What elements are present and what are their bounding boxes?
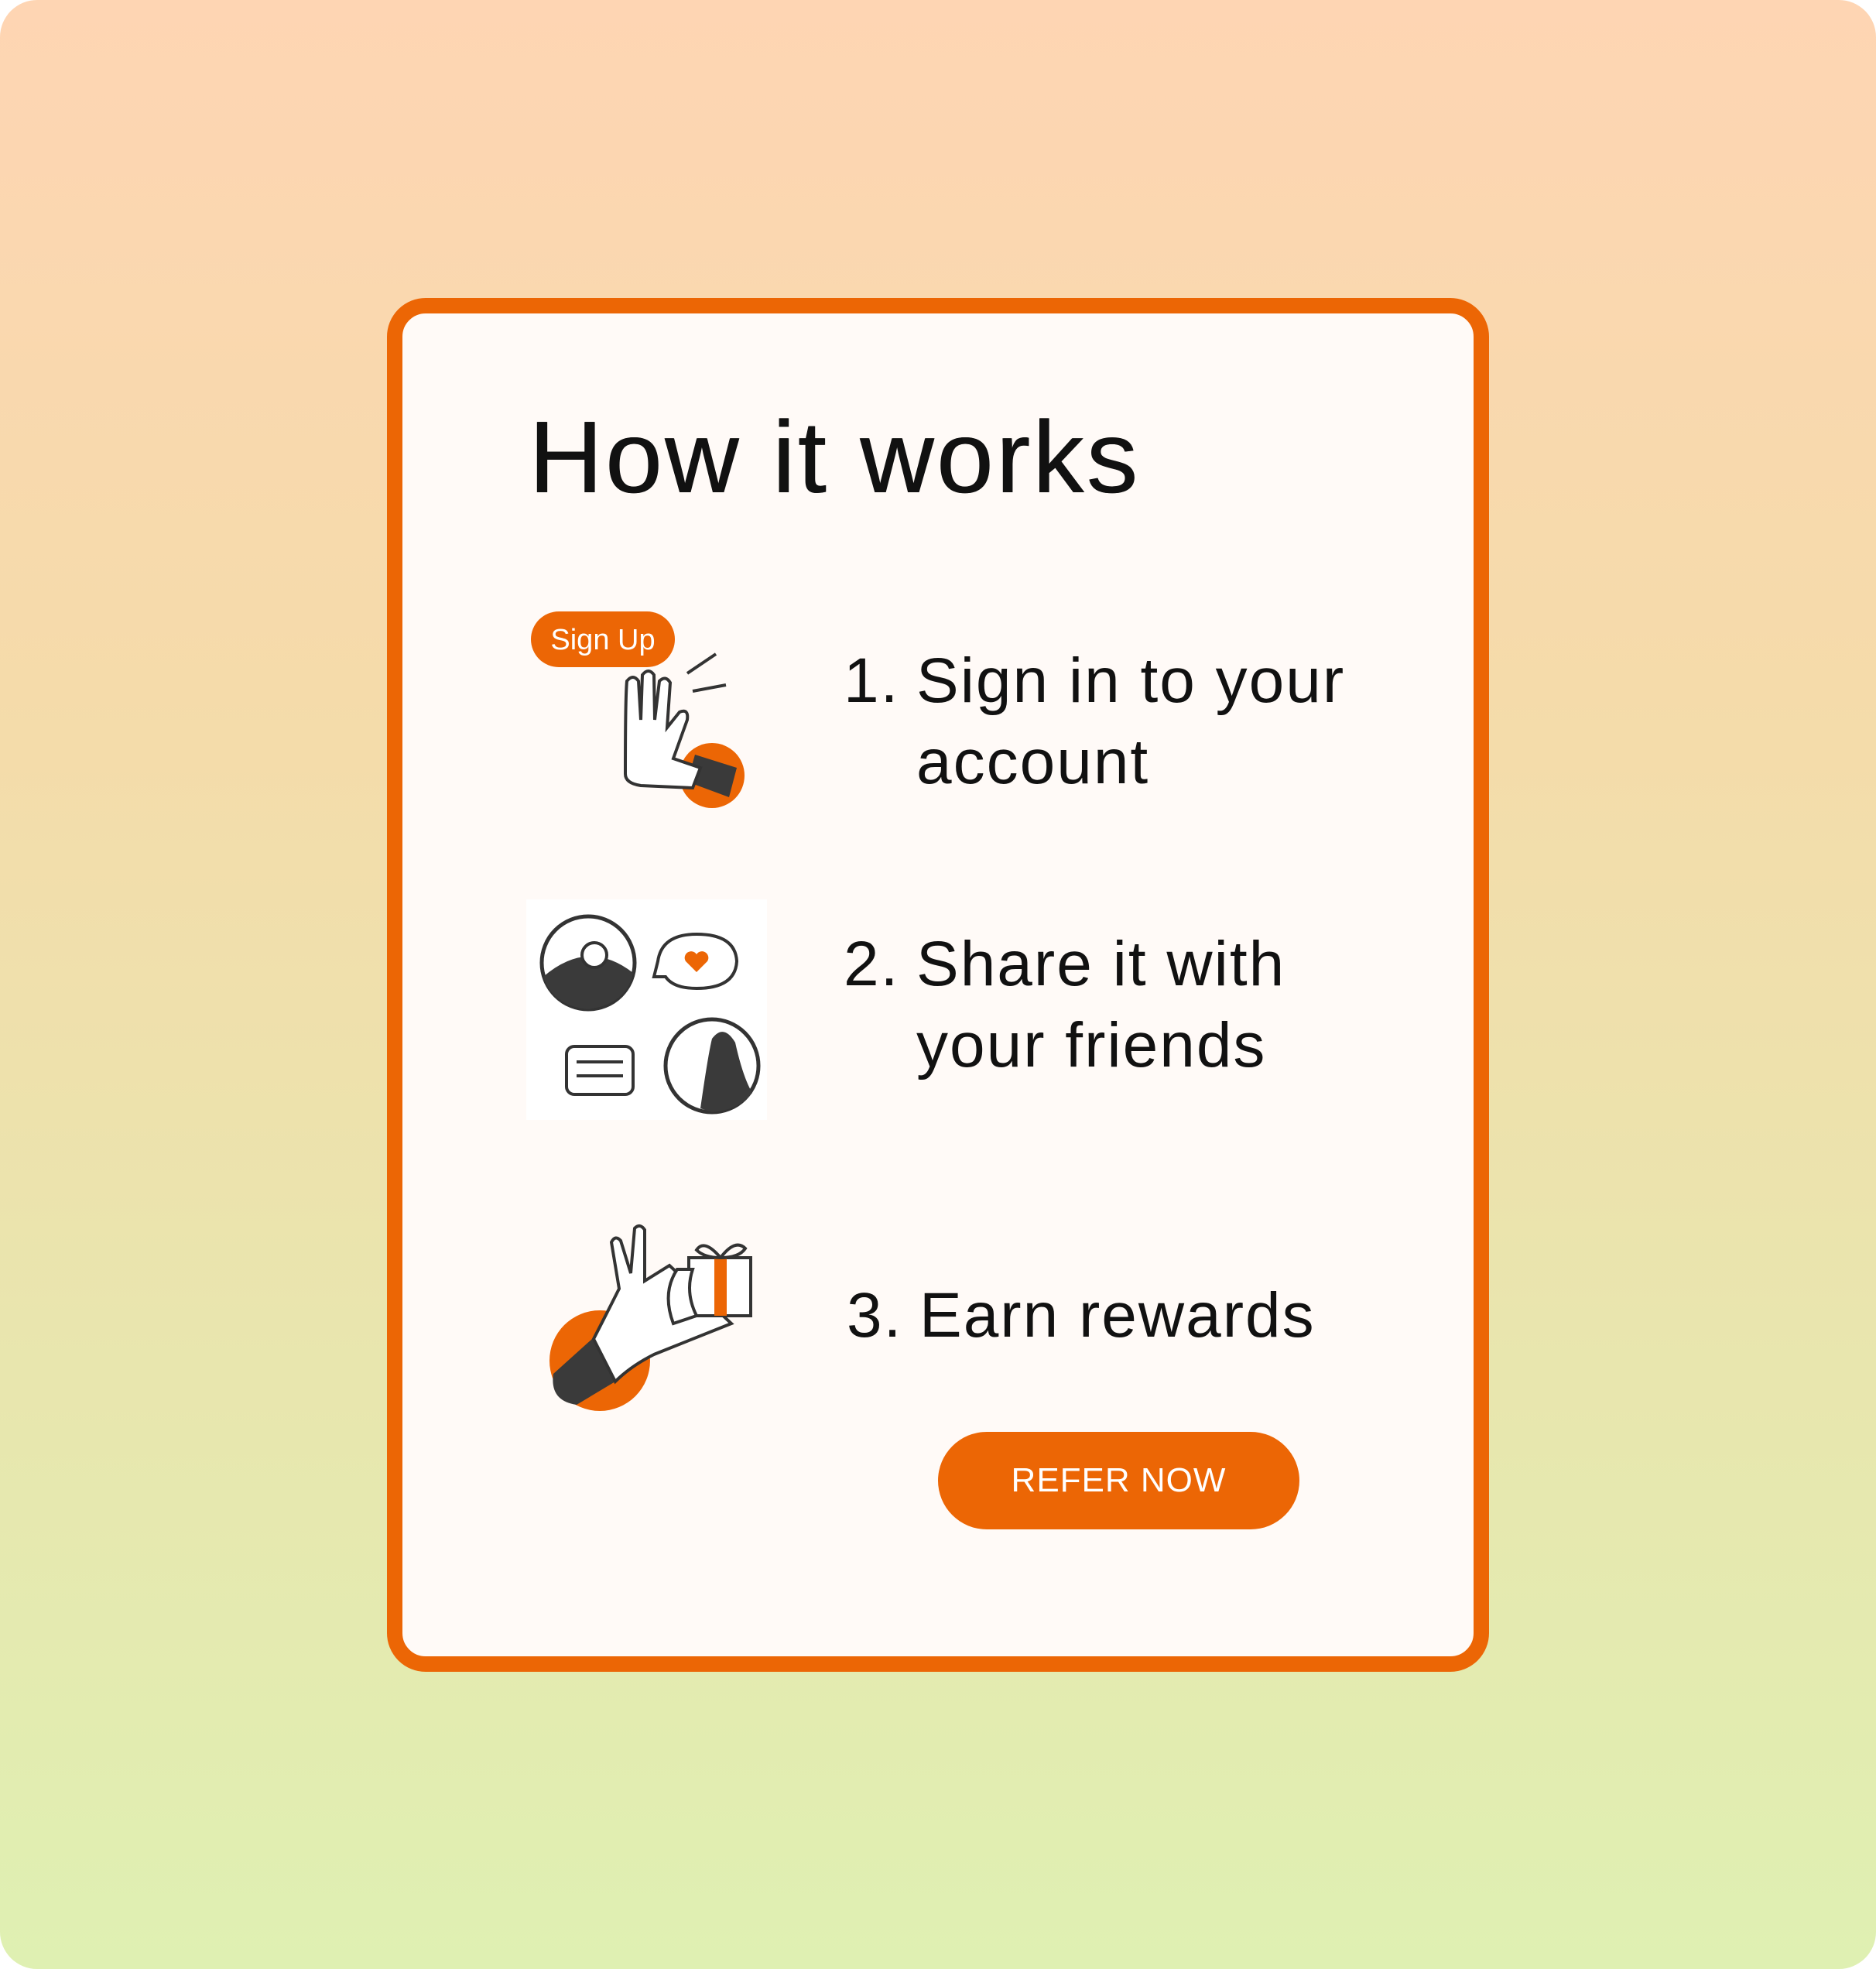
- step 1 text: 1.: [844, 645, 899, 716]
- step 3 text: 3.: [847, 1280, 902, 1351]
- step 2 text: [844, 929, 1285, 1080]
- step 2 text: 2.: [844, 929, 899, 999]
- icon: earn rewards: [549, 1224, 752, 1411]
- step 1 text: Sign in to your: [916, 645, 1345, 716]
- button: refer now: [938, 1432, 1299, 1529]
- icon: sign up hand: [531, 611, 745, 808]
- title: How it works: [529, 400, 1140, 514]
- icon: sign up hand: Sign Up: [550, 624, 656, 656]
- step 2 text: your friends: [916, 1010, 1266, 1080]
- step 1 text: [844, 645, 1345, 797]
- step 2 text: Share it with: [916, 929, 1285, 999]
- panel: card: [387, 298, 1489, 1672]
- icon: share with friends: [540, 915, 760, 1115]
- button: refer now: REFER NOW: [1012, 1461, 1226, 1499]
- step 1 text: account: [916, 727, 1149, 797]
- step 3 text: Earn rewards: [919, 1280, 1316, 1351]
